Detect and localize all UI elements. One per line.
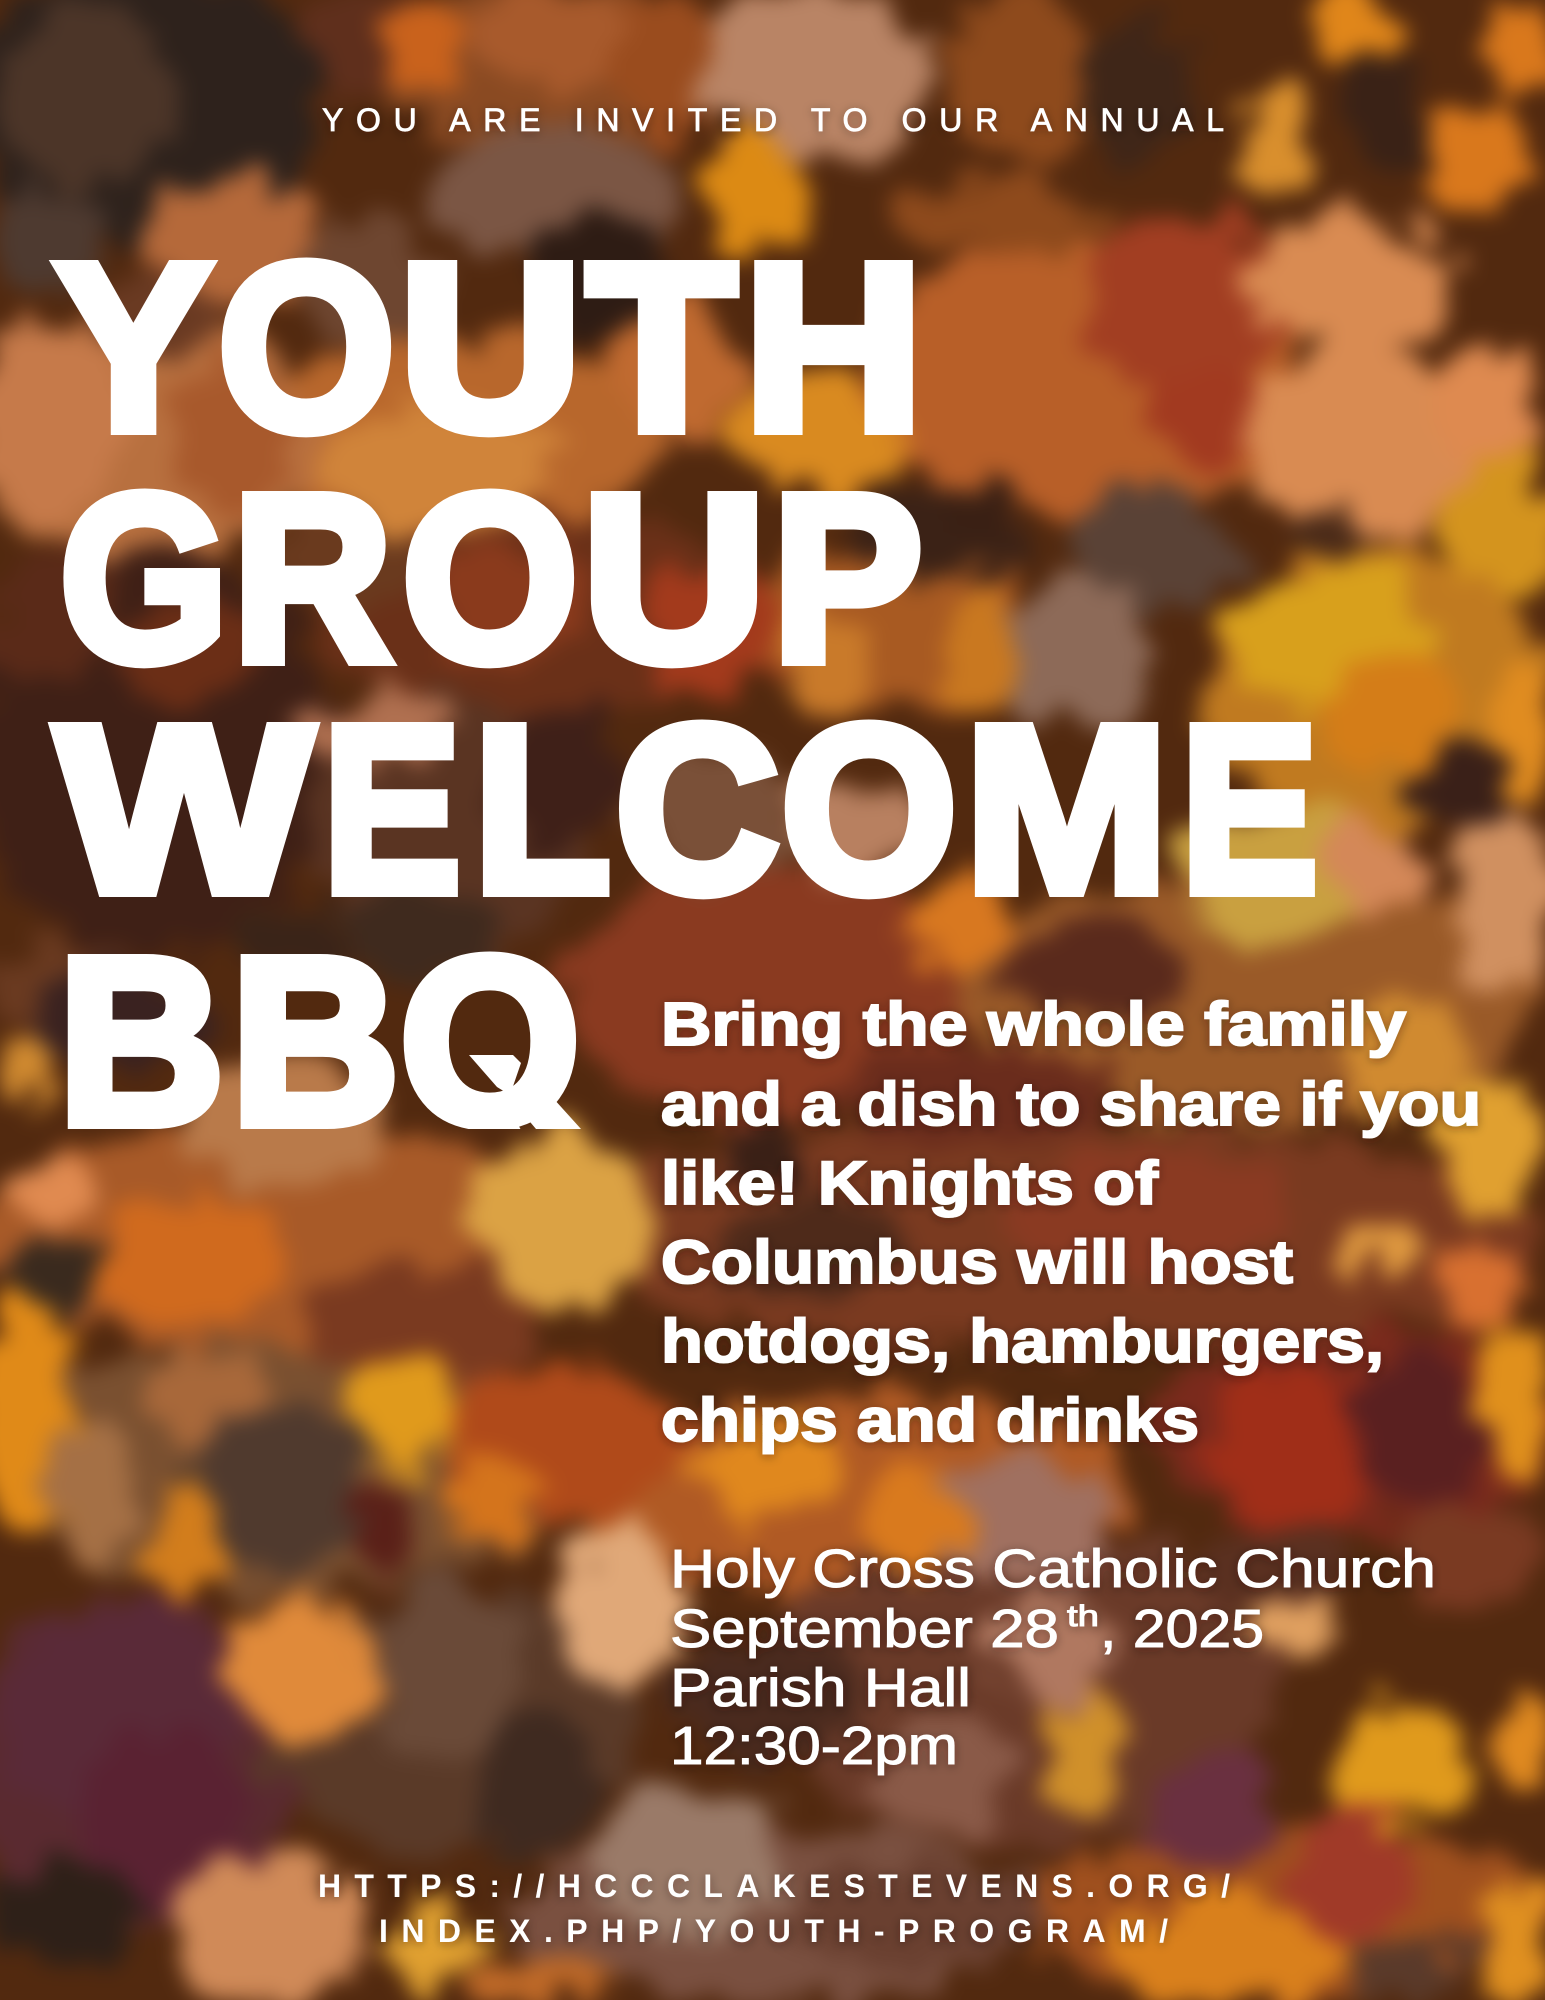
title: T xyxy=(587,214,736,479)
title: U xyxy=(582,446,766,711)
title: R xyxy=(233,447,392,711)
title: L xyxy=(474,676,611,941)
website link: INDEX.PHP/YOUTH-PROGRAM/ xyxy=(379,1913,1168,1949)
eyebrow: invitation line: YOU ARE INVITED TO OUR ANNUAL xyxy=(322,102,1224,138)
title xyxy=(55,214,1318,1174)
title: E xyxy=(1181,676,1318,941)
invitation description: like! Knights of xyxy=(661,1149,1159,1217)
title: Q xyxy=(400,908,580,1174)
title: W xyxy=(56,676,313,941)
website link xyxy=(318,1868,1230,1949)
invitation description: Columbus will host xyxy=(661,1228,1293,1296)
title: G xyxy=(60,447,228,711)
title: B xyxy=(58,910,224,1174)
invitation description: and a dish to share if you xyxy=(661,1070,1481,1138)
invitation description: chips and drinks xyxy=(661,1386,1199,1454)
event details: , 2025 xyxy=(1100,1599,1264,1659)
invitation description xyxy=(661,990,1481,1454)
title: B xyxy=(231,908,399,1173)
title: H xyxy=(744,215,923,480)
invitation description: Bring the whole family xyxy=(661,990,1406,1058)
title: P xyxy=(772,446,923,710)
website link: HTTPS://HCCCLAKESTEVENS.ORG/ xyxy=(318,1868,1230,1904)
event details: Holy Cross Catholic Church xyxy=(670,1539,1436,1599)
title: C xyxy=(615,677,779,942)
event details: September 28 xyxy=(670,1599,1059,1659)
title: U xyxy=(399,215,582,479)
title: O xyxy=(402,446,578,711)
event details: 12:30-2pm xyxy=(670,1716,958,1776)
title: M xyxy=(965,677,1168,942)
title: E xyxy=(323,678,461,942)
event details xyxy=(670,1539,1436,1776)
title: O xyxy=(218,216,395,480)
invitation description: hotdogs, hamburgers, xyxy=(661,1307,1384,1375)
title: Y xyxy=(55,215,212,479)
title: O xyxy=(781,677,957,942)
event details: th xyxy=(1067,1600,1099,1633)
event details: Parish Hall xyxy=(670,1658,971,1718)
